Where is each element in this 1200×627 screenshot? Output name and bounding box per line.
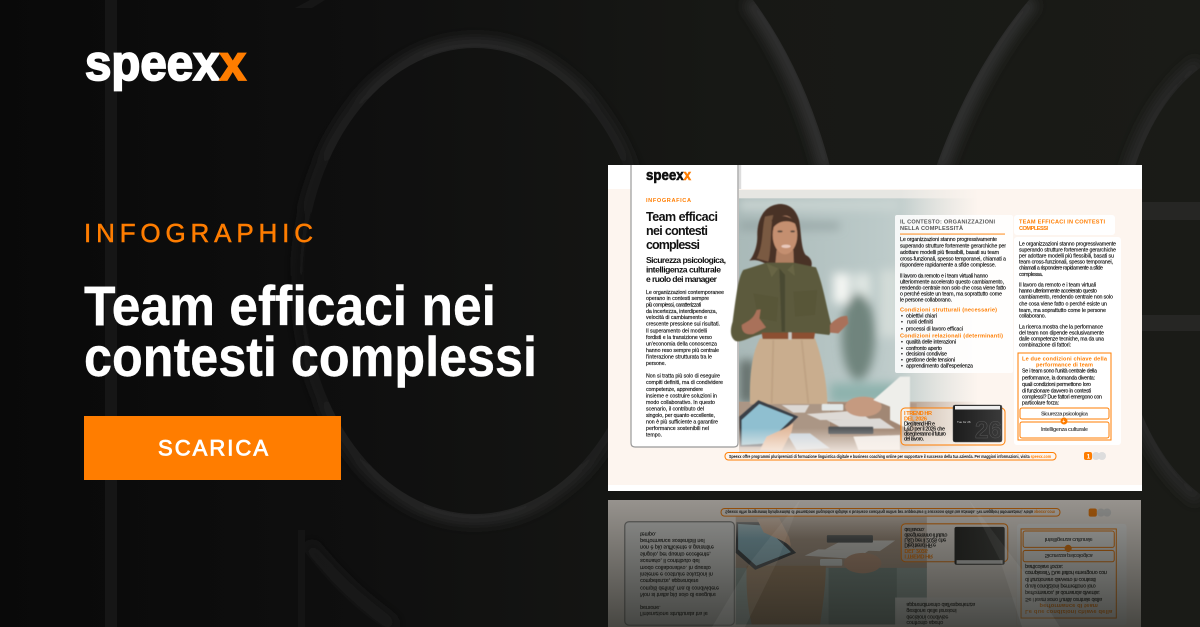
callout: key conditions: particolare forza: [1022,401,1059,407]
reflection of document: performance di team [1040,602,1098,608]
reflection of document: L&D per il 2026 che [904,536,946,542]
relational conditions: qualità delle interazioni [906,340,956,346]
panel: team text: complessa. [1019,272,1043,278]
context text [900,237,1006,304]
callout: key conditions: performance, la domanda diventa: [1022,375,1095,381]
structural conditions [900,308,997,332]
reflection of document: scenario, il contributo del [640,557,700,563]
callout: key conditions: Se i team sono l'unità centrale della [1022,369,1097,375]
panel: intro column [631,165,741,447]
thumbnail: 26 [975,417,1002,444]
body text: da incertezza, interdipendenza, [646,309,717,315]
structural conditions: Condizioni strutturali (necessarie) [900,308,997,314]
context text: o perché esiste un team, ma soprattutto come [900,292,1002,298]
callout: key conditions: di funzionare davvero in contesti [1022,388,1091,394]
body text: un'economia della conoscenza [646,342,717,348]
body text: più complessi, caratterizzati [646,303,701,309]
relational conditions: confronto aperto [906,346,942,352]
context text: ulteriormente accelerato questo cambiamento, [900,279,1004,285]
label: INFOGRAFICA [646,198,691,204]
reflection of document: particolare forza: [1025,563,1064,569]
panel: team text: La ricerca mostra che la performance [1019,324,1103,330]
callout: key conditions: quali condizioni permettono loro [1022,382,1091,388]
reflection of document [608,500,1141,627]
callout: key conditions: Le due condizioni chiave della [1022,357,1108,363]
footer note [725,452,1056,460]
body text: performance sostenibili nel [646,426,709,432]
body text: singolo, per quanto eccellente, [646,413,715,419]
relational conditions: • [901,340,903,346]
reflected photo [736,517,927,625]
reflection of document: compiti definiti, ma di condividere [640,584,719,590]
structural conditions: ruoli definiti [907,319,933,325]
body text: modo collaborativo. In questo [646,400,715,406]
callout: HR trends [901,405,1005,445]
heading: nei contesti [646,224,708,238]
reflection of document: non è più sufficiente a garantire [640,544,714,550]
callout: key conditions [1018,353,1111,440]
panel: team text: chiamati a rispondere rapidamente a sfide [1019,265,1103,271]
relational conditions: gestione delle tensioni [906,358,955,364]
button: SCARICA [158,436,268,460]
reflection of document: Non si tratta più solo di eseguire [640,591,716,597]
structural conditions: • [901,326,903,332]
callout: HR trends: Dieci trend HR e [904,422,935,428]
button [84,416,341,480]
context text: Il lavoro da remoto e i team virtuali hanno [900,273,988,279]
reflection of document: modo collaborativo. In questo [640,564,711,570]
body text [646,290,724,439]
callout: HR trends: L&D per il 2026 che [904,427,945,433]
panel: team text: team, ma soprattutto come le persone [1019,308,1106,314]
pagination: 1 [1087,453,1091,460]
heading [646,210,718,252]
context heading [900,220,1005,234]
relational conditions: • [901,358,903,364]
subheading: intelligenza culturale [646,264,721,274]
title: contesti complessi [84,325,537,388]
document page background [608,165,1142,491]
reflection of document: performance sostenibili nel [640,537,705,543]
reflection of document: Speexx offre programmi pluripremiati di formazione linguistica digitale e business coaching online per supportare il successo della tua azienda. Per maggiori informazioni, visita speexx.com [725,509,1055,515]
context text: le persone collaborano. [900,298,952,304]
panel: team text: Le organizzazioni stanno progressivamente [1019,241,1116,247]
body text: operano in contesti sempre [646,296,709,302]
panel: context [895,215,1013,373]
reflection of document: disegneranno il futuro [904,531,947,537]
body text: Non si tratta più solo di eseguire [646,374,720,380]
reflection of document: quali condizioni permettono loro [1025,582,1096,588]
reflection of document: confronto aperto [906,619,943,625]
relational conditions: • [901,346,903,352]
relational conditions: Condizioni relazionali (determinanti) [900,334,1003,340]
body text: tempo. [646,433,662,439]
body text: l'interazione strutturata tra le [646,355,712,361]
context heading: NELLA COMPLESSITÀ [900,225,963,232]
callout: HR trends: disegneranno il futuro [904,432,946,438]
panel: team text: hanno ulteriormente accelerato questo [1019,288,1097,294]
photo: office background [739,190,973,452]
context text: rendendo centrale non solo che cosa viene fatto [900,286,1006,292]
structural conditions: • [901,319,903,325]
context heading: IL CONTESTO: ORGANIZZAZIONI [900,220,995,226]
title: Team efficaci nei [84,274,496,337]
thumbnail: Tue for 26 [957,420,971,424]
title [84,274,537,388]
eyebrow: INFOGRAPHIC [84,218,313,248]
reflection of document: l'interazione strutturata tra le [640,610,708,616]
subheading: e ruolo dei manager [646,274,718,284]
body text: persone. [646,361,666,367]
reflection of document: Dieci trend HR e [904,542,936,548]
panel: team text: che cosa viene fatto o perché esiste un [1019,301,1107,307]
thumbnail [953,405,1002,444]
footer note: Speexx offre programmi pluripremiati di formazione linguistica digitale e business coaching online per supportare il successo della tua azienda. Per maggiori informazioni, visita speexx.com [729,454,1051,460]
body text: compiti definiti, ma di condividere [646,380,723,386]
callout: HR trends: I TREND HR [904,411,932,417]
context text: Le organizzazioni stanno progressivamente [900,237,997,243]
panel: team text: superando strutture fortemente gerarchiche [1019,247,1116,253]
structural conditions: processi di lavoro efficaci [906,326,963,332]
body text: competenze, apprendere [646,387,703,393]
subheading: Sicurezza psicologica, [646,255,726,265]
reflection of document: del lavoro. [904,526,925,532]
photo: presenter [731,204,910,451]
panel: team heading: TEAM EFFICACI IN CONTESTI [1019,220,1105,226]
reflection of document: singolo, per quanto eccellente, [640,550,711,556]
reflection of document: insieme e costruire soluzioni in [640,570,713,576]
body text: Le organizzazioni contemporanee [646,290,724,296]
reflection of document: decisioni condivise [906,613,948,619]
panel: team text: per adottare modelli più flessibili, basati su [1019,254,1114,260]
panel: team text: Il lavoro da remoto e i team virtuali [1019,283,1096,289]
panel: team text: del team non dipende esclusivamente [1019,330,1104,336]
pagination [1084,452,1106,460]
callout: key conditions: performance di team [1036,363,1093,369]
reflection of document: gestione delle tensioni [906,607,957,613]
body text: scenario, il contributo del [646,407,704,413]
panel: document preview [608,165,1142,491]
body text: insieme e costruire soluzioni in [646,394,717,400]
context text: cross-funzionali, spesso temporanei, chiamati a [900,257,1006,263]
callout: key conditions: Sicurezza psicologica [1041,412,1089,418]
body text: hanno reso sempre più centrale [646,348,719,354]
reflection of document: apprendimento dall'esperienza [906,601,975,607]
body text: fordisti e la transizione verso [646,335,712,341]
structural conditions: obiettivi chiari [906,314,937,320]
reflection of document: Sicurezza psicologica [1045,552,1094,558]
callout: key conditions: Intelligenza culturale [1041,427,1088,433]
body text: non è più sufficiente a garantire [646,420,718,426]
reflection of document: Se i team sono l'unità centrale della [1025,596,1102,602]
reflection of document: I TREND HR [904,553,934,559]
relational conditions [900,334,1003,370]
context text: adottare modelli più flessibili, basati su team [900,250,1000,256]
mini logo: speexx [646,168,691,184]
reflection of document: Le due condizioni chiave della [1025,608,1113,614]
subheading [646,255,726,284]
context text: rispondere rapidamente a sfide complesse. [900,263,996,269]
relational conditions: apprendimento dall'esperienza [906,364,973,370]
reflection of document: persone. [640,604,661,610]
context text: superando strutture fortemente gerarchiche per [900,244,1006,250]
relational conditions: • [901,364,903,370]
panel: team heading: COMPLESSI [1019,226,1048,232]
reflection of document: complessi? Due fattori emergono con [1025,569,1107,575]
reflection of document: di funzionare davvero in contesti [1025,576,1096,582]
callout: HR trends: del lavoro. [904,437,924,443]
relational conditions: decisioni condivise [906,352,947,358]
reflection of document: DEL 2026 [904,547,928,553]
structural conditions: • [901,314,903,320]
heading: Team efficaci [646,210,718,224]
panel: team text: collaborano. [1019,314,1046,320]
reflection of document: Intelligenza culturale [1045,536,1093,542]
body text: velocità di cambiamento e [646,315,707,321]
photo bottom fade [739,428,980,458]
reflection of document: tempo. [640,530,657,536]
panel: team text: cambiamento, rendendo centrale non solo [1019,295,1113,301]
panel: team text [1014,237,1121,445]
callout: key conditions: + [1062,419,1065,425]
callout: key conditions: complessi? Due fattori emergono con [1022,395,1102,401]
reflection of document: competenze, apprendere [640,577,699,583]
panel: team text: team cross-funzionali, spesso temporanei, [1019,259,1113,265]
panel: team text: dalle competenze tecniche, ma da una [1019,336,1104,342]
relational conditions: • [901,352,903,358]
logo: speexx [85,35,246,91]
body text: crescente pressione sui risultati. [646,322,720,328]
reflection of document: performance, la domanda diventa: [1025,589,1100,595]
heading: complessi [646,238,700,252]
panel: team heading [1014,215,1115,235]
panel: team text: combinazione di fattori: [1019,343,1071,349]
callout: HR trends: DEL 2026 [904,416,927,422]
body text: Il superamento dei modelli [646,329,707,335]
